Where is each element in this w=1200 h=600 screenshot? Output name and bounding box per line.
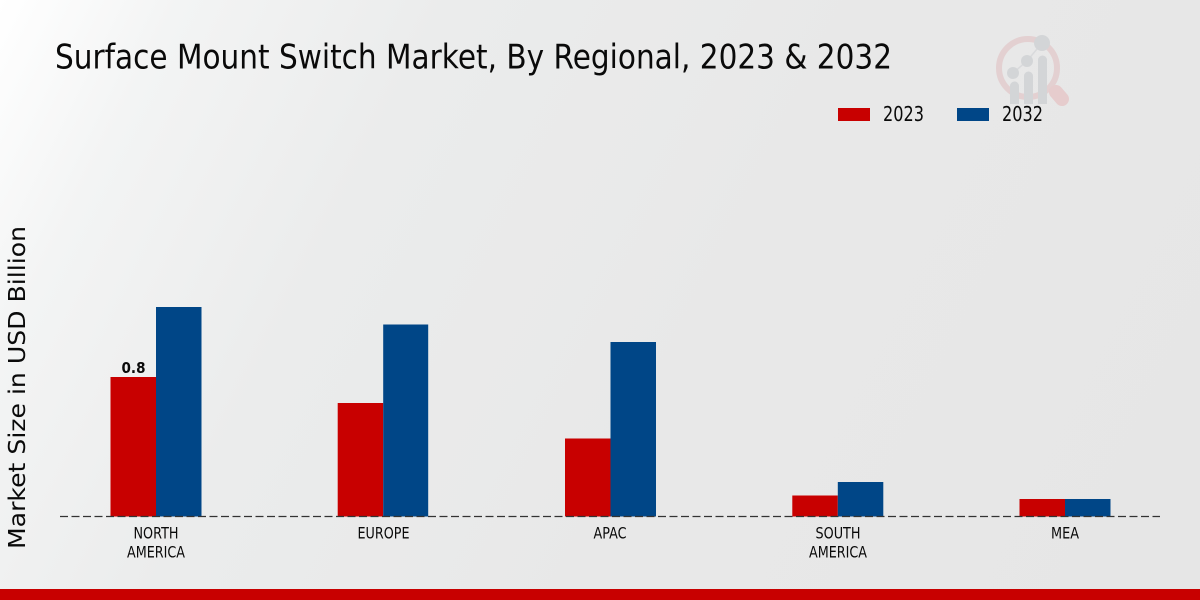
label: North America: NORTH <box>134 524 178 542</box>
label: MEA: MEA <box>1051 524 1079 542</box>
watermark logo <box>999 35 1062 104</box>
y axis label: Market Size in USD Billion <box>5 226 31 549</box>
legend: 2023 <box>838 102 924 126</box>
label: South America: AMERICA <box>809 542 867 562</box>
label: North America: AMERICA <box>127 542 185 562</box>
value label: 0.8 <box>122 359 146 377</box>
x axis labels <box>127 524 1079 562</box>
bar chart <box>60 307 1160 516</box>
label: Europe: EUROPE <box>358 524 410 542</box>
bars: APAC <box>565 342 656 516</box>
label: APAC: APAC <box>594 524 626 542</box>
bottom bar <box>0 589 1200 600</box>
title: Surface Mount Switch Market, By Regional, 2023 & 2032 <box>55 38 892 76</box>
label: South America: SOUTH <box>816 524 860 542</box>
legend: 2023: 2023 <box>883 102 924 126</box>
baseline <box>60 516 1160 518</box>
legend <box>838 102 1043 126</box>
label: South America <box>809 524 867 562</box>
legend: 2032 <box>957 102 1043 126</box>
label: North America <box>127 524 185 562</box>
bars: Europe <box>338 324 428 516</box>
bars: North America <box>110 307 202 516</box>
legend: 2032: 2032 <box>1002 102 1043 126</box>
bars: South America <box>792 482 883 516</box>
bars: MEA <box>1020 499 1110 516</box>
